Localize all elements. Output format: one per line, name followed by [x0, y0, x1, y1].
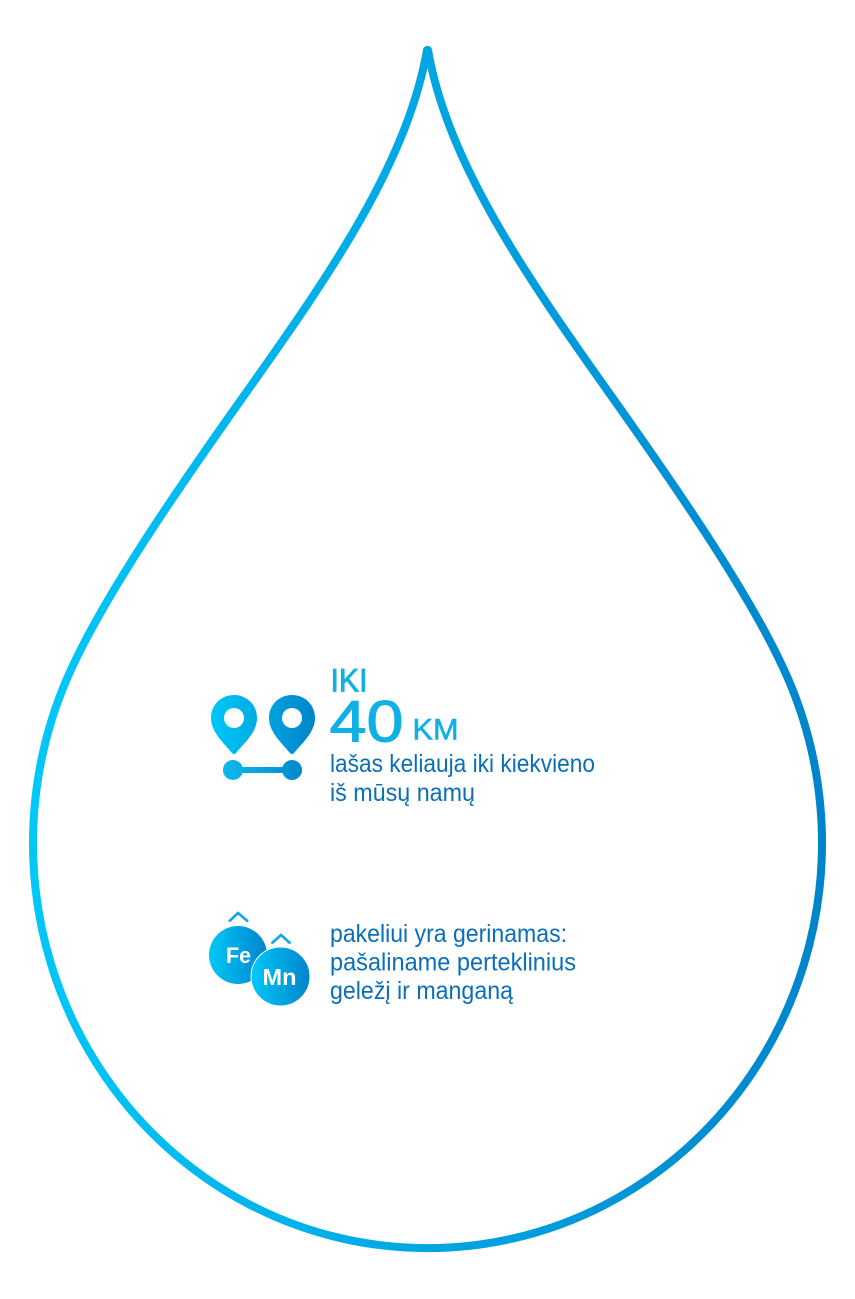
- distance description: iš mūsų namų: [330, 779, 475, 807]
- treatment description: [330, 920, 576, 1005]
- icon: left pin: [211, 695, 257, 754]
- text: KM: KM: [412, 714, 458, 746]
- icon: Fe up chevron: [229, 913, 248, 922]
- distance description: [330, 750, 595, 807]
- text: 40: 40: [330, 690, 404, 754]
- treatment description: geležį ir manganą: [330, 977, 513, 1005]
- treatment description: pakeliui yra gerinamas:: [330, 920, 567, 948]
- treatment description: pašaliname perteklinius: [330, 948, 576, 976]
- icon: route connector: [223, 760, 302, 780]
- distance heading: [330, 662, 458, 754]
- icon: map pins with route: [211, 695, 315, 780]
- icon: right pin: [269, 695, 315, 754]
- text: IKI: IKI: [330, 662, 368, 698]
- icon: Fe circle: Fe: [226, 943, 251, 968]
- icon: Mn circle: Mn: [262, 964, 296, 990]
- icon: iron and manganese: [209, 913, 310, 1006]
- distance description: lašas keliauja iki kiekvieno: [330, 750, 595, 778]
- icon: Mn up chevron: [272, 935, 290, 944]
